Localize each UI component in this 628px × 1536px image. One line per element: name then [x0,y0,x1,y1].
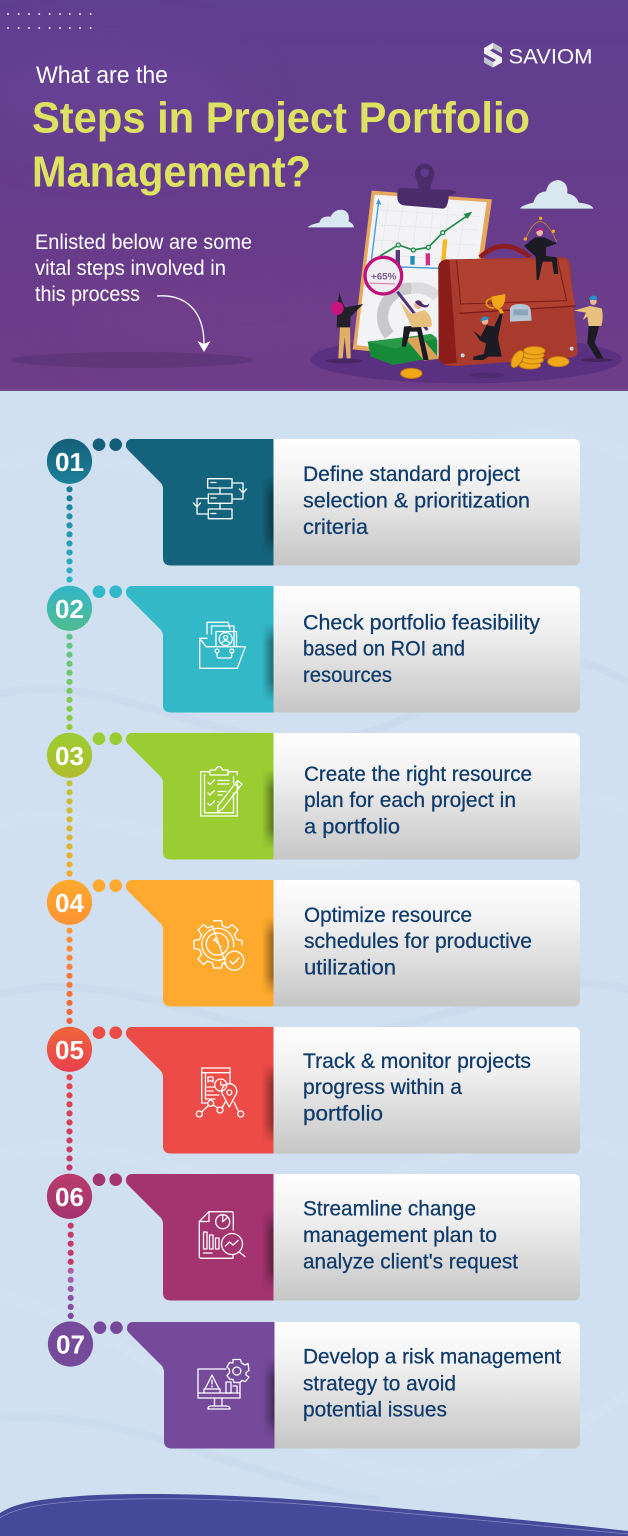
magnifier [365,257,427,330]
title: What are the [36,62,168,89]
icon: report with location pin [196,1068,244,1117]
grey gauge [383,288,412,335]
step 07 [48,1321,580,1448]
step number [47,1027,92,1072]
step number: 01 [55,447,84,477]
step text [303,1198,518,1274]
step text: Define standard project [303,463,520,486]
step 01 [47,438,580,566]
step number [47,586,92,631]
connector dots [93,879,122,892]
step text: criteria [303,516,368,539]
step text: progress within a [303,1076,462,1099]
cloud right [520,180,593,209]
timeline connector dots [70,489,71,1317]
step number [47,733,92,778]
coloured tab [126,1174,274,1300]
person: pink hair [325,293,363,363]
title: Management? [32,148,311,196]
icon: document with magnifier [199,1212,245,1258]
coloured tab [126,439,274,566]
connector dots [93,438,122,451]
grey text card [274,1174,580,1300]
step text: Create the right resource [304,763,532,786]
step number: 02 [55,594,84,624]
step 05 [47,1026,580,1154]
step number [47,439,92,484]
step text: management plan to [303,1224,497,1247]
step text: Streamline change [303,1198,476,1220]
cloud left [308,210,354,227]
briefcase [438,246,578,366]
person: trophy holder [473,294,505,360]
clip [415,164,434,190]
step text: plan for each project in [304,789,516,812]
step text: potential issues [303,1398,447,1422]
coloured tab [126,880,274,1006]
step 02 [47,585,580,712]
step text: utilization [304,956,396,980]
step number [47,1174,92,1219]
bars [396,250,400,266]
header panel [0,0,628,391]
chart axes [371,202,439,268]
icon: monitor with alert and gear [198,1360,249,1409]
footer wave [0,1494,628,1536]
icon: gear with gauge and check [194,921,244,970]
connector dots [93,732,122,745]
title: Steps in Project Portfolio [32,94,530,142]
grey text card [274,733,580,860]
step text [303,1050,531,1126]
step text: Check portfolio feasibility [303,612,541,634]
grey text card [274,1027,580,1154]
step text: resources [303,664,392,687]
grey text card [274,1322,580,1448]
step 03 [47,732,580,860]
step text: analyze client's request [303,1250,518,1274]
step number [48,1321,93,1367]
step number: 06 [55,1182,84,1212]
coloured tab [126,1027,274,1154]
icon: folder with profile [200,622,245,668]
green trend line [380,215,468,256]
step text: Optimize resource [304,904,472,927]
step 04 [47,879,580,1006]
intro text: vital steps involved in [35,257,226,280]
coloured tab [127,1322,274,1448]
intro text [35,231,252,306]
logo: Saviom [484,43,592,68]
step text: schedules for productive [304,930,532,953]
step text [303,463,530,539]
magnifier: +65% [371,271,396,281]
connector dots [93,1173,122,1186]
clipboard [353,164,492,360]
person: juggler on briefcase [524,217,558,280]
step number [47,880,92,925]
step text [303,1346,561,1422]
title [32,62,530,196]
person: holding magnifier [400,300,432,360]
grey text card [274,880,580,1006]
step number: 07 [56,1330,85,1360]
person: right side [574,295,613,362]
grey text card [274,586,580,712]
step text [304,763,532,838]
step 06 [47,1173,580,1300]
clasp [510,304,532,322]
step text: strategy to avoid [303,1372,456,1396]
step text: Track & monitor projects [303,1050,531,1073]
step text: portfolio [303,1102,383,1126]
logo: Saviom: SAVIOM [508,45,592,68]
icon: flowchart [194,479,246,519]
grey text card [274,439,580,566]
step number: 05 [55,1035,84,1065]
coloured tab [126,586,274,712]
connector dots [93,585,122,598]
step number: 03 [55,741,84,771]
step text [303,612,541,687]
step text [304,904,532,980]
decorative dot rows [7,13,92,29]
step text: based on ROI and [303,638,465,660]
step text: Develop a risk management [303,1346,561,1368]
connector dots [94,1321,123,1334]
step number: 04 [55,888,85,918]
arrow [157,296,210,352]
coloured tab [126,733,274,860]
step text: selection & prioritization [303,490,530,512]
step text: a portfolio [304,816,400,838]
intro shadow ellipse [10,352,254,368]
money stack [368,334,439,365]
intro text: Enlisted below are some [35,231,252,254]
ground shadow [310,335,622,383]
illustration: clipboard, briefcase and people [308,164,622,383]
icon: checklist and pencil [201,767,242,816]
connector dots [93,1026,122,1039]
intro text: this process [35,283,140,306]
coins [401,347,569,378]
